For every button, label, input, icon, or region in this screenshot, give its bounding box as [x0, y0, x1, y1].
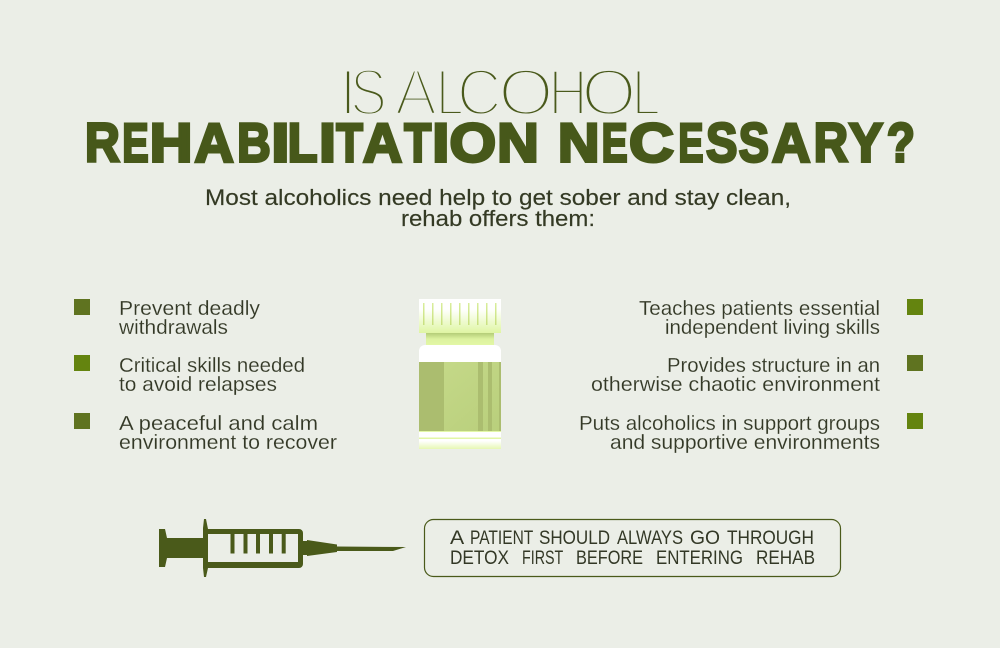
title: R — [85, 112, 120, 174]
title: A — [395, 55, 437, 129]
item 1 left — [118, 297, 261, 339]
item 2 right: otherwise chaotic environment — [591, 373, 880, 396]
intro text — [205, 185, 791, 231]
item 3 right — [579, 412, 880, 454]
icon: pill bottle — [419, 299, 501, 449]
title: I — [432, 112, 450, 174]
title: C — [457, 55, 502, 129]
title: T — [336, 112, 363, 174]
bullet 1 left — [74, 299, 90, 315]
title: O — [581, 55, 637, 129]
title: E — [602, 112, 628, 174]
title: C — [629, 112, 674, 174]
title: E — [678, 112, 704, 174]
callout: detox: DETOX — [450, 548, 509, 569]
title: I — [319, 112, 336, 174]
title: R — [814, 112, 848, 174]
title: ? — [887, 112, 915, 174]
callout: detox: THROUGH — [727, 528, 814, 549]
title: L — [632, 55, 661, 129]
item 3 right: Puts alcoholics in support groups — [579, 412, 880, 435]
title: S — [739, 112, 769, 174]
item 1 right: independent living skills — [665, 316, 880, 339]
callout: detox: SHOULD — [539, 528, 610, 549]
item 3 right: and supportive environments — [610, 431, 880, 454]
item 3 left: A peaceful and calm — [119, 412, 318, 435]
callout: detox: BEFORE — [576, 548, 643, 569]
callout: detox: PATIENT — [470, 528, 534, 549]
callout: detox: A — [450, 528, 465, 549]
callout: detox: REHAB — [756, 548, 815, 569]
title: E — [122, 112, 149, 174]
title: Y — [849, 112, 883, 174]
item 1 left: Prevent deadly — [119, 297, 261, 320]
item 2 left: Critical skills needed — [119, 354, 305, 377]
callout: detox: FIRST — [522, 548, 564, 569]
title: A — [772, 112, 810, 174]
item 2 right — [591, 354, 880, 396]
item 2 right: Provides structure in an — [667, 354, 880, 377]
callout: detox: GO — [690, 528, 720, 549]
bullet 3 right — [907, 413, 923, 429]
left list — [74, 297, 337, 454]
title: O — [450, 112, 496, 174]
title: S — [706, 112, 737, 174]
callout: detox: ENTERING — [656, 548, 743, 569]
title: N — [497, 112, 539, 174]
title: S — [350, 55, 387, 129]
callout: detox: ALWAYS — [617, 528, 683, 549]
bullet 1 right — [907, 299, 923, 315]
item 2 left — [119, 354, 305, 396]
title: H — [548, 55, 588, 129]
item 1 right: Teaches patients essential — [639, 297, 880, 320]
title: N — [558, 112, 600, 174]
bullet 2 right — [907, 355, 923, 371]
item 1 right — [639, 297, 880, 339]
right list — [579, 297, 923, 454]
icon: syringe — [159, 519, 406, 577]
item 1 left: withdrawals — [118, 316, 228, 339]
title: I — [339, 55, 357, 129]
title: A — [363, 112, 402, 174]
item 2 left: to avoid relapses — [119, 373, 277, 396]
title: O — [498, 55, 554, 129]
bullet 2 left — [74, 355, 90, 371]
intro text: rehab offers them: — [401, 206, 595, 231]
title: T — [404, 112, 431, 174]
item 3 left: environment to recover — [119, 431, 337, 454]
title: A — [194, 112, 234, 174]
title: H — [150, 112, 192, 174]
title: L — [436, 55, 464, 129]
title: B — [237, 112, 271, 174]
bullet 3 left — [74, 413, 90, 429]
title: I — [271, 112, 290, 174]
title — [85, 55, 915, 174]
intro text: Most alcoholics need help to get sober and stay clean, — [205, 185, 791, 210]
item 3 left — [119, 412, 337, 454]
title: L — [288, 112, 318, 174]
callout: detox — [424, 520, 840, 576]
